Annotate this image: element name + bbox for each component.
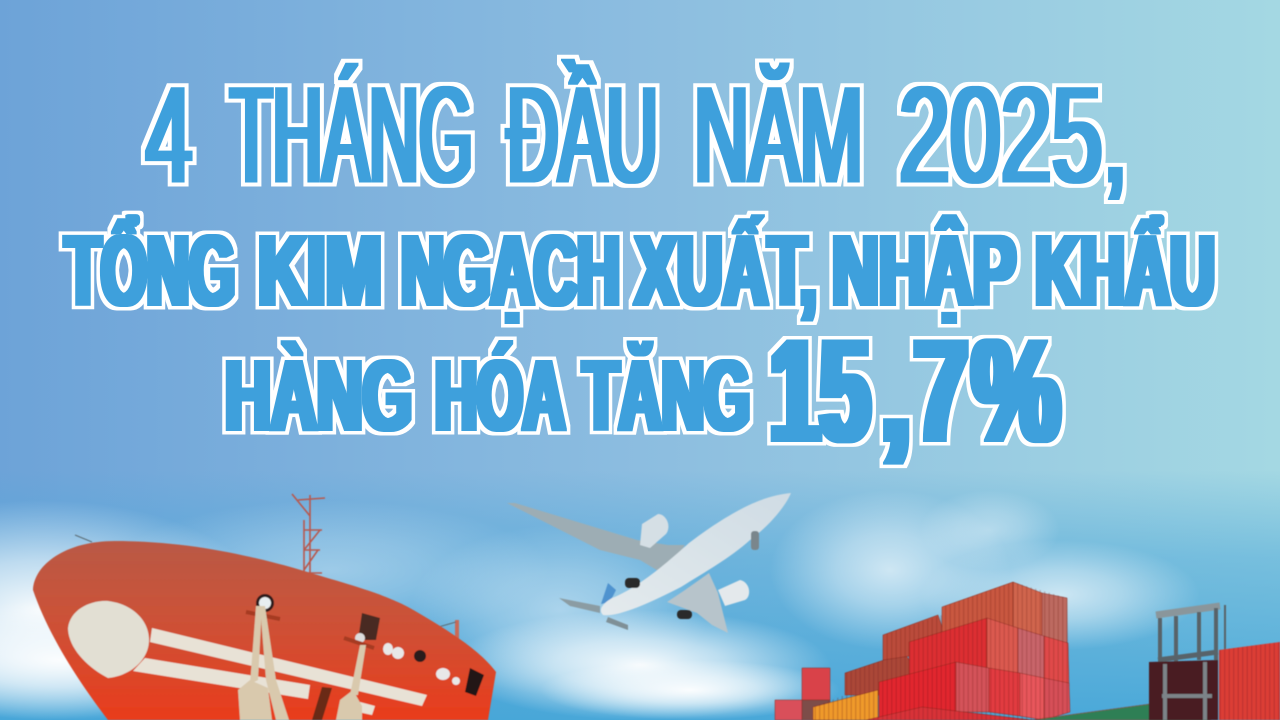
near wing xyxy=(667,573,728,633)
title line 2: KIM xyxy=(258,215,382,327)
fuselage xyxy=(601,493,791,615)
ship hull xyxy=(33,541,496,720)
clouds xyxy=(0,490,1200,720)
tail fin xyxy=(601,583,616,604)
lower container xyxy=(879,662,956,720)
portholes xyxy=(383,643,484,696)
forklift base xyxy=(1149,660,1218,720)
container ribs xyxy=(813,582,1070,720)
headline figure 15,7%: 15 xyxy=(770,309,870,472)
title xyxy=(65,59,1215,472)
title line 3: TĂNG xyxy=(583,340,750,452)
bottom container xyxy=(866,707,1032,720)
anchor hole left xyxy=(246,594,280,619)
horizontal stabilizers xyxy=(559,598,600,613)
illustration: stacked containers xyxy=(775,582,1211,720)
title line 2: NGẠCH xyxy=(401,215,620,327)
title line 1: 4 xyxy=(146,59,192,212)
top container xyxy=(942,582,1013,650)
far left red container xyxy=(802,668,830,700)
anchor fitting right xyxy=(344,613,380,648)
title line 1: NĂM xyxy=(694,59,863,212)
landing gear xyxy=(625,531,759,619)
illustration: cargo ship xyxy=(33,494,496,720)
lower sky photo band xyxy=(0,470,1280,720)
headline figure 15,7%: 7 xyxy=(914,309,968,472)
title line 3 xyxy=(225,340,750,452)
near engine xyxy=(718,580,749,606)
hull stripes xyxy=(150,628,427,706)
headline figure 15,7%: % xyxy=(972,309,1060,472)
headline figure 15,7%: , xyxy=(880,309,912,472)
far engine xyxy=(640,514,668,548)
forklift frame xyxy=(1156,605,1225,662)
ship mast xyxy=(75,494,457,643)
illustration: forklift and container xyxy=(1149,605,1280,720)
title line 1: ĐẦU xyxy=(507,59,658,212)
title line 1: THÁNG xyxy=(230,59,473,212)
title line 3: HÀNG xyxy=(225,340,412,452)
title line 2 xyxy=(65,214,1215,327)
title line 3: HÓA xyxy=(435,340,565,452)
title line 2: NHẬP xyxy=(832,215,1016,327)
middle container xyxy=(909,618,987,678)
right red container xyxy=(1219,642,1280,720)
mooring ropes xyxy=(238,606,366,720)
hull white circle xyxy=(68,601,149,678)
title line 1 xyxy=(146,59,1128,212)
title line 1: 2025, xyxy=(899,59,1128,212)
title line 2: TỔNG xyxy=(65,215,235,327)
title line 2: XUẤT, xyxy=(635,214,817,327)
headline figure 15,7% xyxy=(770,309,1060,472)
upper left containers xyxy=(845,653,920,695)
illustration: airplane xyxy=(507,493,791,633)
far wing xyxy=(507,503,685,575)
orange container xyxy=(813,690,878,720)
green container xyxy=(1032,698,1211,720)
